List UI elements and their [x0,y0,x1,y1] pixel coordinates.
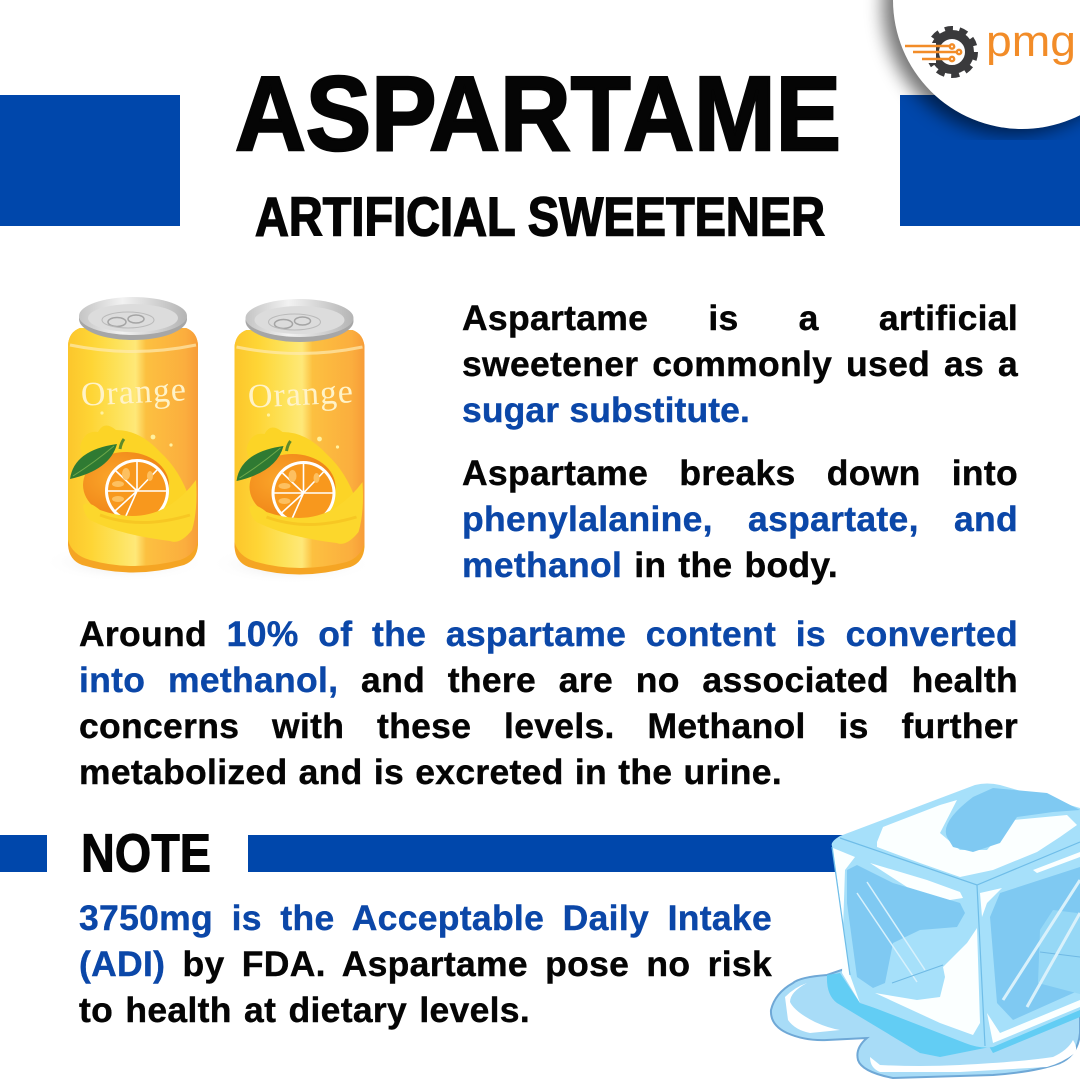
text block: note [79,898,772,1030]
text block: methanol conversion: metabolized and is excreted in the urine. [79,752,782,792]
can left: Orange [80,371,187,414]
text block: definition: sweetener commonly used as a [462,344,1018,384]
text block: methanol conversion: concerns with these levels. Methanol is further [79,706,1018,746]
logo wordmark: pmg [986,17,1076,66]
title block [235,55,841,248]
logo badge [870,0,1080,140]
text block: breakdown: methanol in the body. [462,545,838,585]
text block: definition: Aspartame is a artificial [462,298,1018,338]
text block: breakdown [462,453,1018,585]
text block: breakdown: Aspartame breaks down into [462,453,1018,493]
can right: Orange [247,373,354,416]
can left [43,297,207,582]
subtitle: ARTIFICIAL SWEETENER [255,186,825,248]
title: ASPARTAME [235,55,841,173]
illustration: orange soda cans [68,297,364,574]
text block: definition: sugar substitute. [462,390,750,430]
text block: definition [462,298,1018,430]
text block: note: to health at dietary levels. [79,990,530,1030]
blue block left of title [0,95,180,226]
text block: methanol conversion [79,614,1018,792]
text block: breakdown: phenylalanine, aspartate, and [462,499,1018,539]
blue note bar right [248,835,848,872]
text block: note: (ADI) by FDA. Aspartame pose no risk [79,944,772,984]
note heading: NOTE [81,824,211,884]
text block: methanol conversion: Around 10% of the aspartame content is converted [79,614,1018,654]
icon: gear with circuit lines [905,29,975,75]
blue block right of title [900,95,1080,226]
cube [832,784,1080,1048]
blue note bar left [0,835,47,872]
text block: note: 3750mg is the Acceptable Daily Intake [79,898,772,938]
can right [210,299,374,584]
puddle [771,950,1080,1078]
text block: methanol conversion: into methanol, and there are no associated health [79,660,1018,700]
